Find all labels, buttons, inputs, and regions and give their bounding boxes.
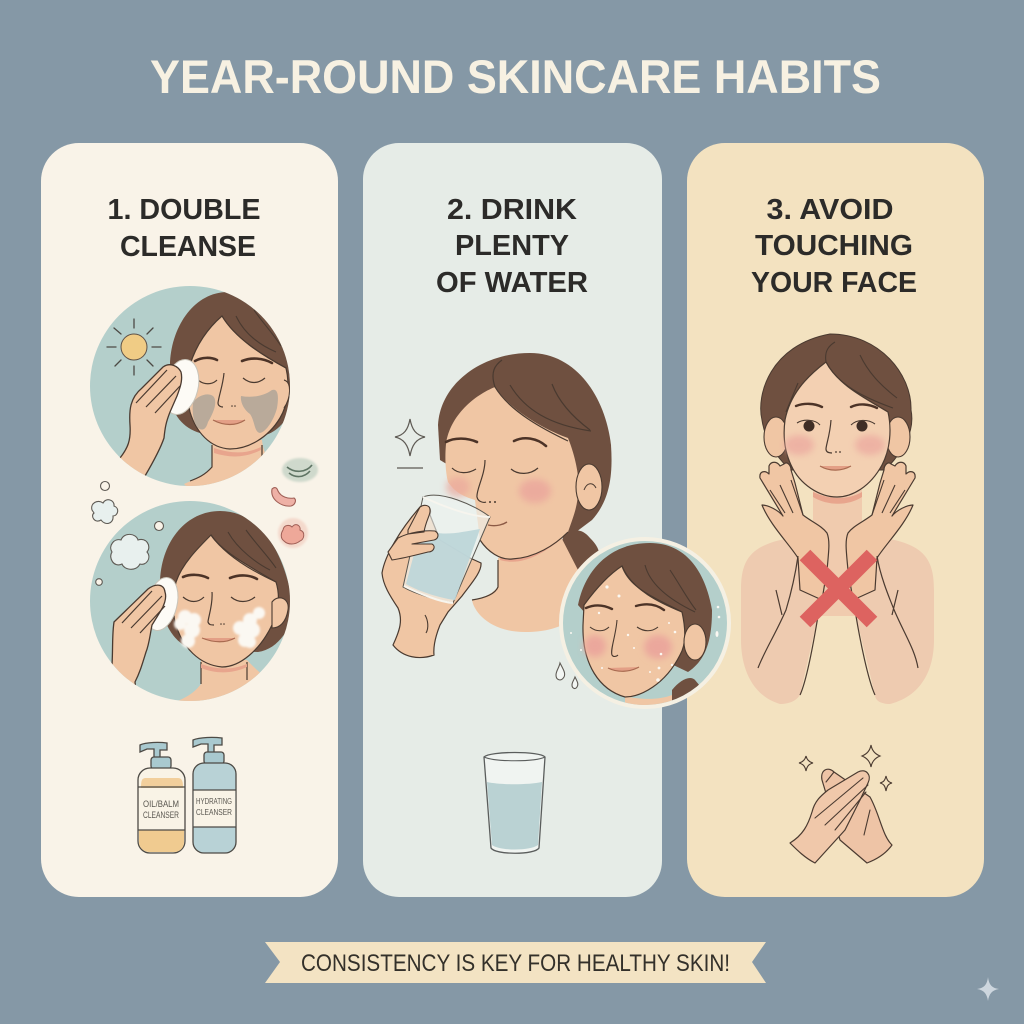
- icon: cleanser bottles: HYDRATING: [196, 796, 232, 806]
- icon: corner sparkle: [977, 977, 999, 1001]
- foam bubbles: [92, 482, 164, 585]
- title: YEAR-ROUND SKINCARE HABITS: [150, 50, 881, 103]
- heading: avoid touching: YOUR FACE: [751, 267, 917, 299]
- panel: drink plenty of water: [363, 143, 662, 897]
- heading: avoid touching: TOUCHING: [755, 230, 913, 262]
- hand and glass: [382, 495, 490, 658]
- heading: double cleanse: 1. DOUBLE: [108, 194, 260, 226]
- icon: cleanser bottles: OIL/BALM: [143, 799, 179, 809]
- heading: avoid touching: 3. AVOID: [766, 194, 894, 226]
- icon: sun: [107, 319, 161, 375]
- illustration: cotton pad removing sun spots: [90, 286, 292, 500]
- heading: drink water: 2. DRINK: [447, 194, 577, 226]
- heading: drink water: PLENTY: [455, 230, 569, 262]
- red cross: [805, 555, 872, 622]
- heading: double cleanse: CLEANSE: [120, 231, 256, 263]
- heading: drink water: OF WATER: [436, 267, 588, 299]
- heading: double cleanse: [108, 194, 260, 263]
- icon: clean hands with sparkles: [790, 745, 892, 863]
- banner: CONSISTENCY IS KEY FOR HEALTHY SKIN!: [301, 950, 730, 977]
- heading: avoid touching: [751, 194, 917, 299]
- banner: [265, 942, 766, 983]
- illustration: hands away from face: [741, 334, 934, 704]
- skincare blobs: [272, 458, 318, 548]
- icon: cleanser bottles: CLEANSER: [143, 810, 179, 820]
- illustration: woman drinking water: [382, 353, 612, 688]
- panel: double cleanse: [41, 143, 338, 897]
- icon: cleanser bottles: [138, 737, 236, 853]
- inset: hydrated face: [561, 539, 729, 710]
- illustration: foam cleansing: [90, 501, 291, 705]
- heading: drink water: [436, 194, 588, 299]
- icon: sparkle: [395, 419, 425, 468]
- icon: cleanser bottles: CLEANSER: [196, 807, 232, 817]
- panel: avoid touching your face: [687, 143, 984, 897]
- hands: [760, 462, 915, 600]
- icon: glass of water: [484, 752, 545, 853]
- water drops: [556, 663, 578, 688]
